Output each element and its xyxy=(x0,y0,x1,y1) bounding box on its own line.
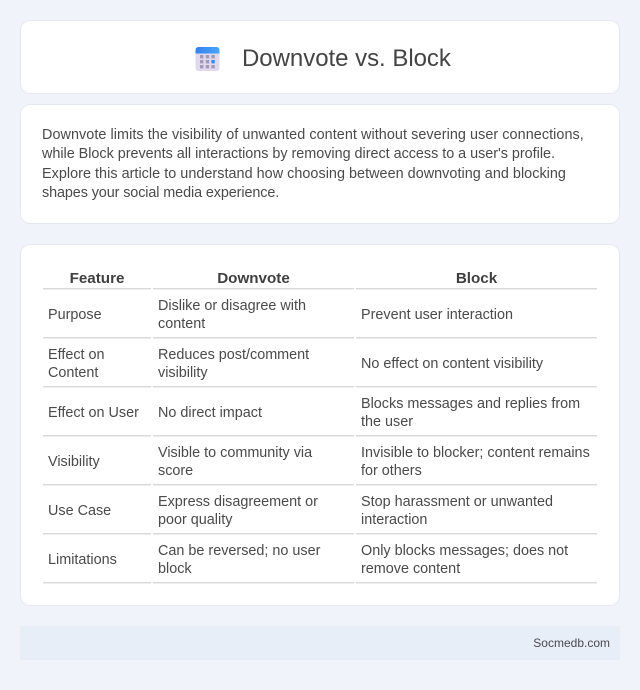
row: Use Case xyxy=(48,494,553,528)
row: Limitations: block xyxy=(158,561,192,577)
title: Downvote vs. Block xyxy=(242,45,451,72)
row: Visibility: score xyxy=(158,463,193,479)
intro text: Downvote limits the visibility of unwanted content without severing user connections, xyxy=(42,127,584,143)
row: Use Case: interaction xyxy=(361,512,427,528)
row: Effect on Content xyxy=(48,347,543,381)
row: Use Case: Use Case xyxy=(48,503,111,519)
row: Visibility xyxy=(48,445,590,479)
footer source text: Socmedb.com xyxy=(533,636,610,650)
row: Visibility: Visibility xyxy=(48,454,100,470)
panel: introduction xyxy=(20,104,620,224)
table header: Downvote xyxy=(217,270,290,287)
row: Purpose: Dislike or disagree with xyxy=(158,298,306,314)
row: Use Case: poor quality xyxy=(158,512,232,528)
footer bar xyxy=(20,626,620,660)
row: Purpose: content xyxy=(158,316,205,332)
intro text: Explore this article to understand how choosing between downvoting and blocking xyxy=(42,166,566,182)
row: Limitations: Only blocks messages; does not xyxy=(361,543,568,559)
row: Visibility: Visible to community via xyxy=(158,445,312,461)
row: Effect on User: Blocks messages and replies from xyxy=(361,396,580,412)
table header: Feature xyxy=(70,270,124,287)
row: Visibility: for others xyxy=(361,463,422,479)
row: Use Case: Express disagreement or xyxy=(158,494,318,510)
row: Effect on Content: Effect on xyxy=(48,347,105,363)
row lines xyxy=(43,288,151,289)
row: Effect on User xyxy=(48,396,580,430)
row: Effect on Content: No effect on content visibility xyxy=(361,356,543,372)
row: Use Case: Stop harassment or unwanted xyxy=(361,494,553,510)
row: Visibility: Invisible to blocker; content remains xyxy=(361,445,590,461)
intro text: while Block prevents all interactions by removing direct access to a user's profile. xyxy=(42,146,555,162)
table header xyxy=(70,270,498,287)
row: Limitations: Limitations xyxy=(48,552,117,568)
row: Effect on Content: Reduces post/comment xyxy=(158,347,309,363)
row: Effect on User: the user xyxy=(361,414,413,430)
intro text: shapes your social media experience. xyxy=(42,185,279,201)
row: Purpose: Prevent user interaction xyxy=(361,307,513,323)
row: Limitations: remove content xyxy=(361,561,460,577)
icon: calendar xyxy=(196,47,220,71)
panel: comparison table xyxy=(20,244,620,606)
row: Limitations: Can be reversed; no user xyxy=(158,543,320,559)
table header: Block xyxy=(456,270,497,287)
row: Effect on Content: visibility xyxy=(158,365,208,381)
panel: title card xyxy=(20,20,620,94)
row: Effect on Content: Content xyxy=(48,365,98,381)
row: Effect on User: Effect on User xyxy=(48,405,139,421)
row: Purpose: Purpose xyxy=(48,307,102,323)
row: Effect on User: No direct impact xyxy=(158,405,262,421)
row: Purpose xyxy=(48,298,513,332)
intro text xyxy=(42,127,584,201)
row: Limitations xyxy=(48,543,568,577)
